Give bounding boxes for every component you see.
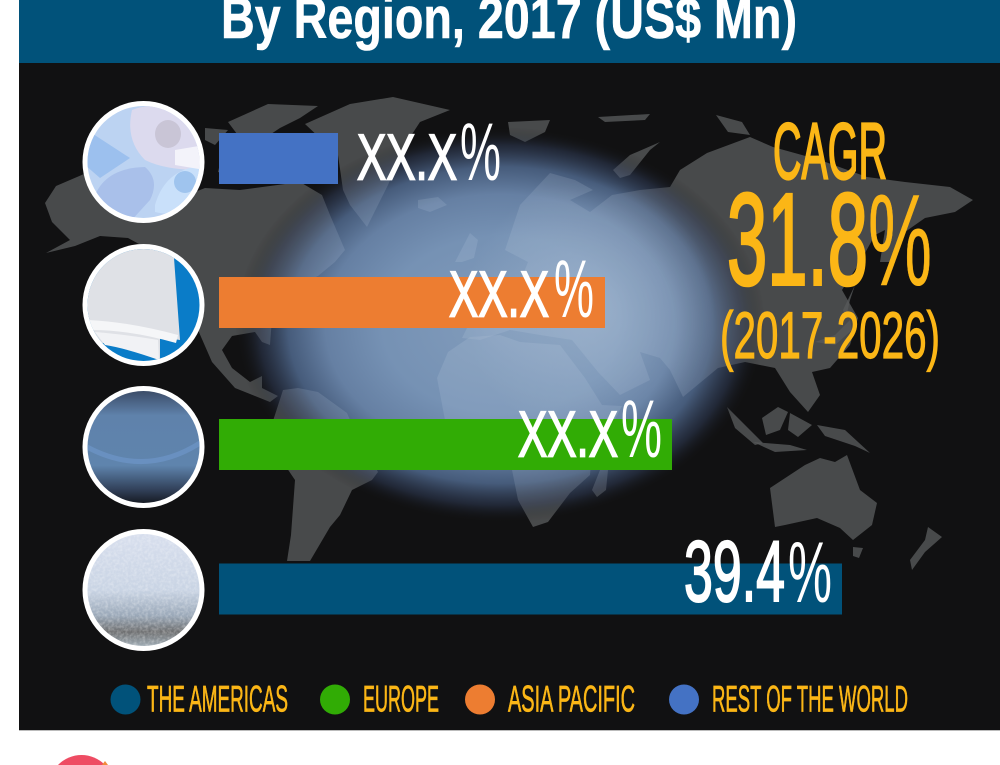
bar: the americas xyxy=(219,524,842,621)
bar: rest of the world xyxy=(219,107,501,198)
CAGR value: 31.8 xyxy=(727,166,868,312)
CAGR label: CAGR xyxy=(773,106,887,196)
value label: % xyxy=(788,525,832,621)
icon: blue foam disc xyxy=(82,386,204,508)
bar: asia pacific xyxy=(219,244,605,335)
bar: europe xyxy=(219,384,672,475)
icon: rolled foam sheets xyxy=(82,101,205,223)
legend: EUROPE xyxy=(363,678,439,720)
value label: % xyxy=(460,107,501,198)
legend: the americas xyxy=(110,678,288,720)
icon: foam sheets on blue xyxy=(82,244,204,366)
callout: CAGR xyxy=(720,106,940,372)
value label: XX.X xyxy=(449,258,549,330)
legend: rest of the world xyxy=(669,678,908,720)
CAGR value: % xyxy=(868,167,932,313)
legend: asia pacific: ASIA PACIFIC xyxy=(508,678,635,720)
glow behind map xyxy=(235,127,765,523)
world map xyxy=(45,97,973,570)
icon: white foam granules xyxy=(82,529,204,651)
land highlight over glow xyxy=(45,97,973,570)
legend: europe xyxy=(320,678,439,720)
value label: XX.X xyxy=(357,120,457,194)
value label: 39.4 xyxy=(684,524,785,620)
logo fragment xyxy=(58,755,108,765)
legend: the americas: THE AMERICAS xyxy=(147,678,288,720)
legend: asia pacific xyxy=(465,678,635,720)
value label: % xyxy=(554,244,594,335)
value label: XX.X xyxy=(518,398,618,470)
value label: % xyxy=(621,384,662,475)
header band xyxy=(19,0,1000,63)
legend xyxy=(110,678,908,720)
